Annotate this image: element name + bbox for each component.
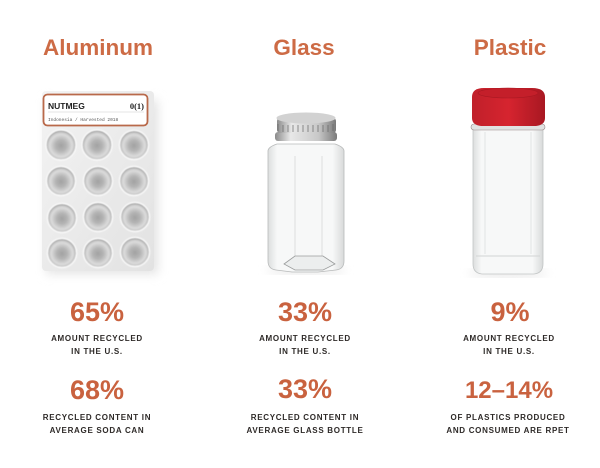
caption: plastic rPET: AND CONSUMED ARE RPET [446,426,570,435]
blister domes [46,130,150,268]
caption: glass amount recycled: IN THE U.S. [279,347,331,356]
blister label: Indonesia / Harvested 2018 [48,117,119,123]
heading: Glass: Glass [273,35,335,60]
stat: plastic 12-14%: 12–14% [465,377,553,404]
caption: plastic amount recycled: IN THE U.S. [483,347,535,356]
caption: glass recycled content: AVERAGE GLASS BOTTLE [247,426,363,435]
blister label: NUTMEG [48,101,85,111]
caption: glass amount recycled: AMOUNT RECYCLED [259,334,351,343]
stat: glass 33% content: 33% [278,374,332,404]
icon: glass jar [266,112,346,274]
caption: aluminum recycled content: AVERAGE SODA CAN [50,426,144,435]
stat: glass 33%: 33% [278,297,332,327]
caption: aluminum amount recycled: AMOUNT RECYCLED [51,334,143,343]
stat: aluminum 65%: 65% [70,297,124,327]
icon: aluminum blister pack [42,91,158,274]
caption: glass recycled content: RECYCLED CONTENT IN [251,413,359,422]
caption: plastic rPET: OF PLASTICS PRODUCED [451,413,565,422]
heading: Plastic: Plastic [474,35,546,60]
stat: plastic 9%: 9% [490,297,530,327]
icon: plastic shaker [468,88,548,277]
caption: plastic amount recycled: AMOUNT RECYCLED [463,334,555,343]
blister label [44,94,148,126]
stat: aluminum 68%: 68% [70,375,124,405]
heading: Aluminum: Aluminum [43,35,153,60]
blister label: 0(1) [130,101,144,111]
caption: aluminum amount recycled: IN THE U.S. [71,347,123,356]
caption: aluminum recycled content: RECYCLED CONTENT IN [43,413,151,422]
